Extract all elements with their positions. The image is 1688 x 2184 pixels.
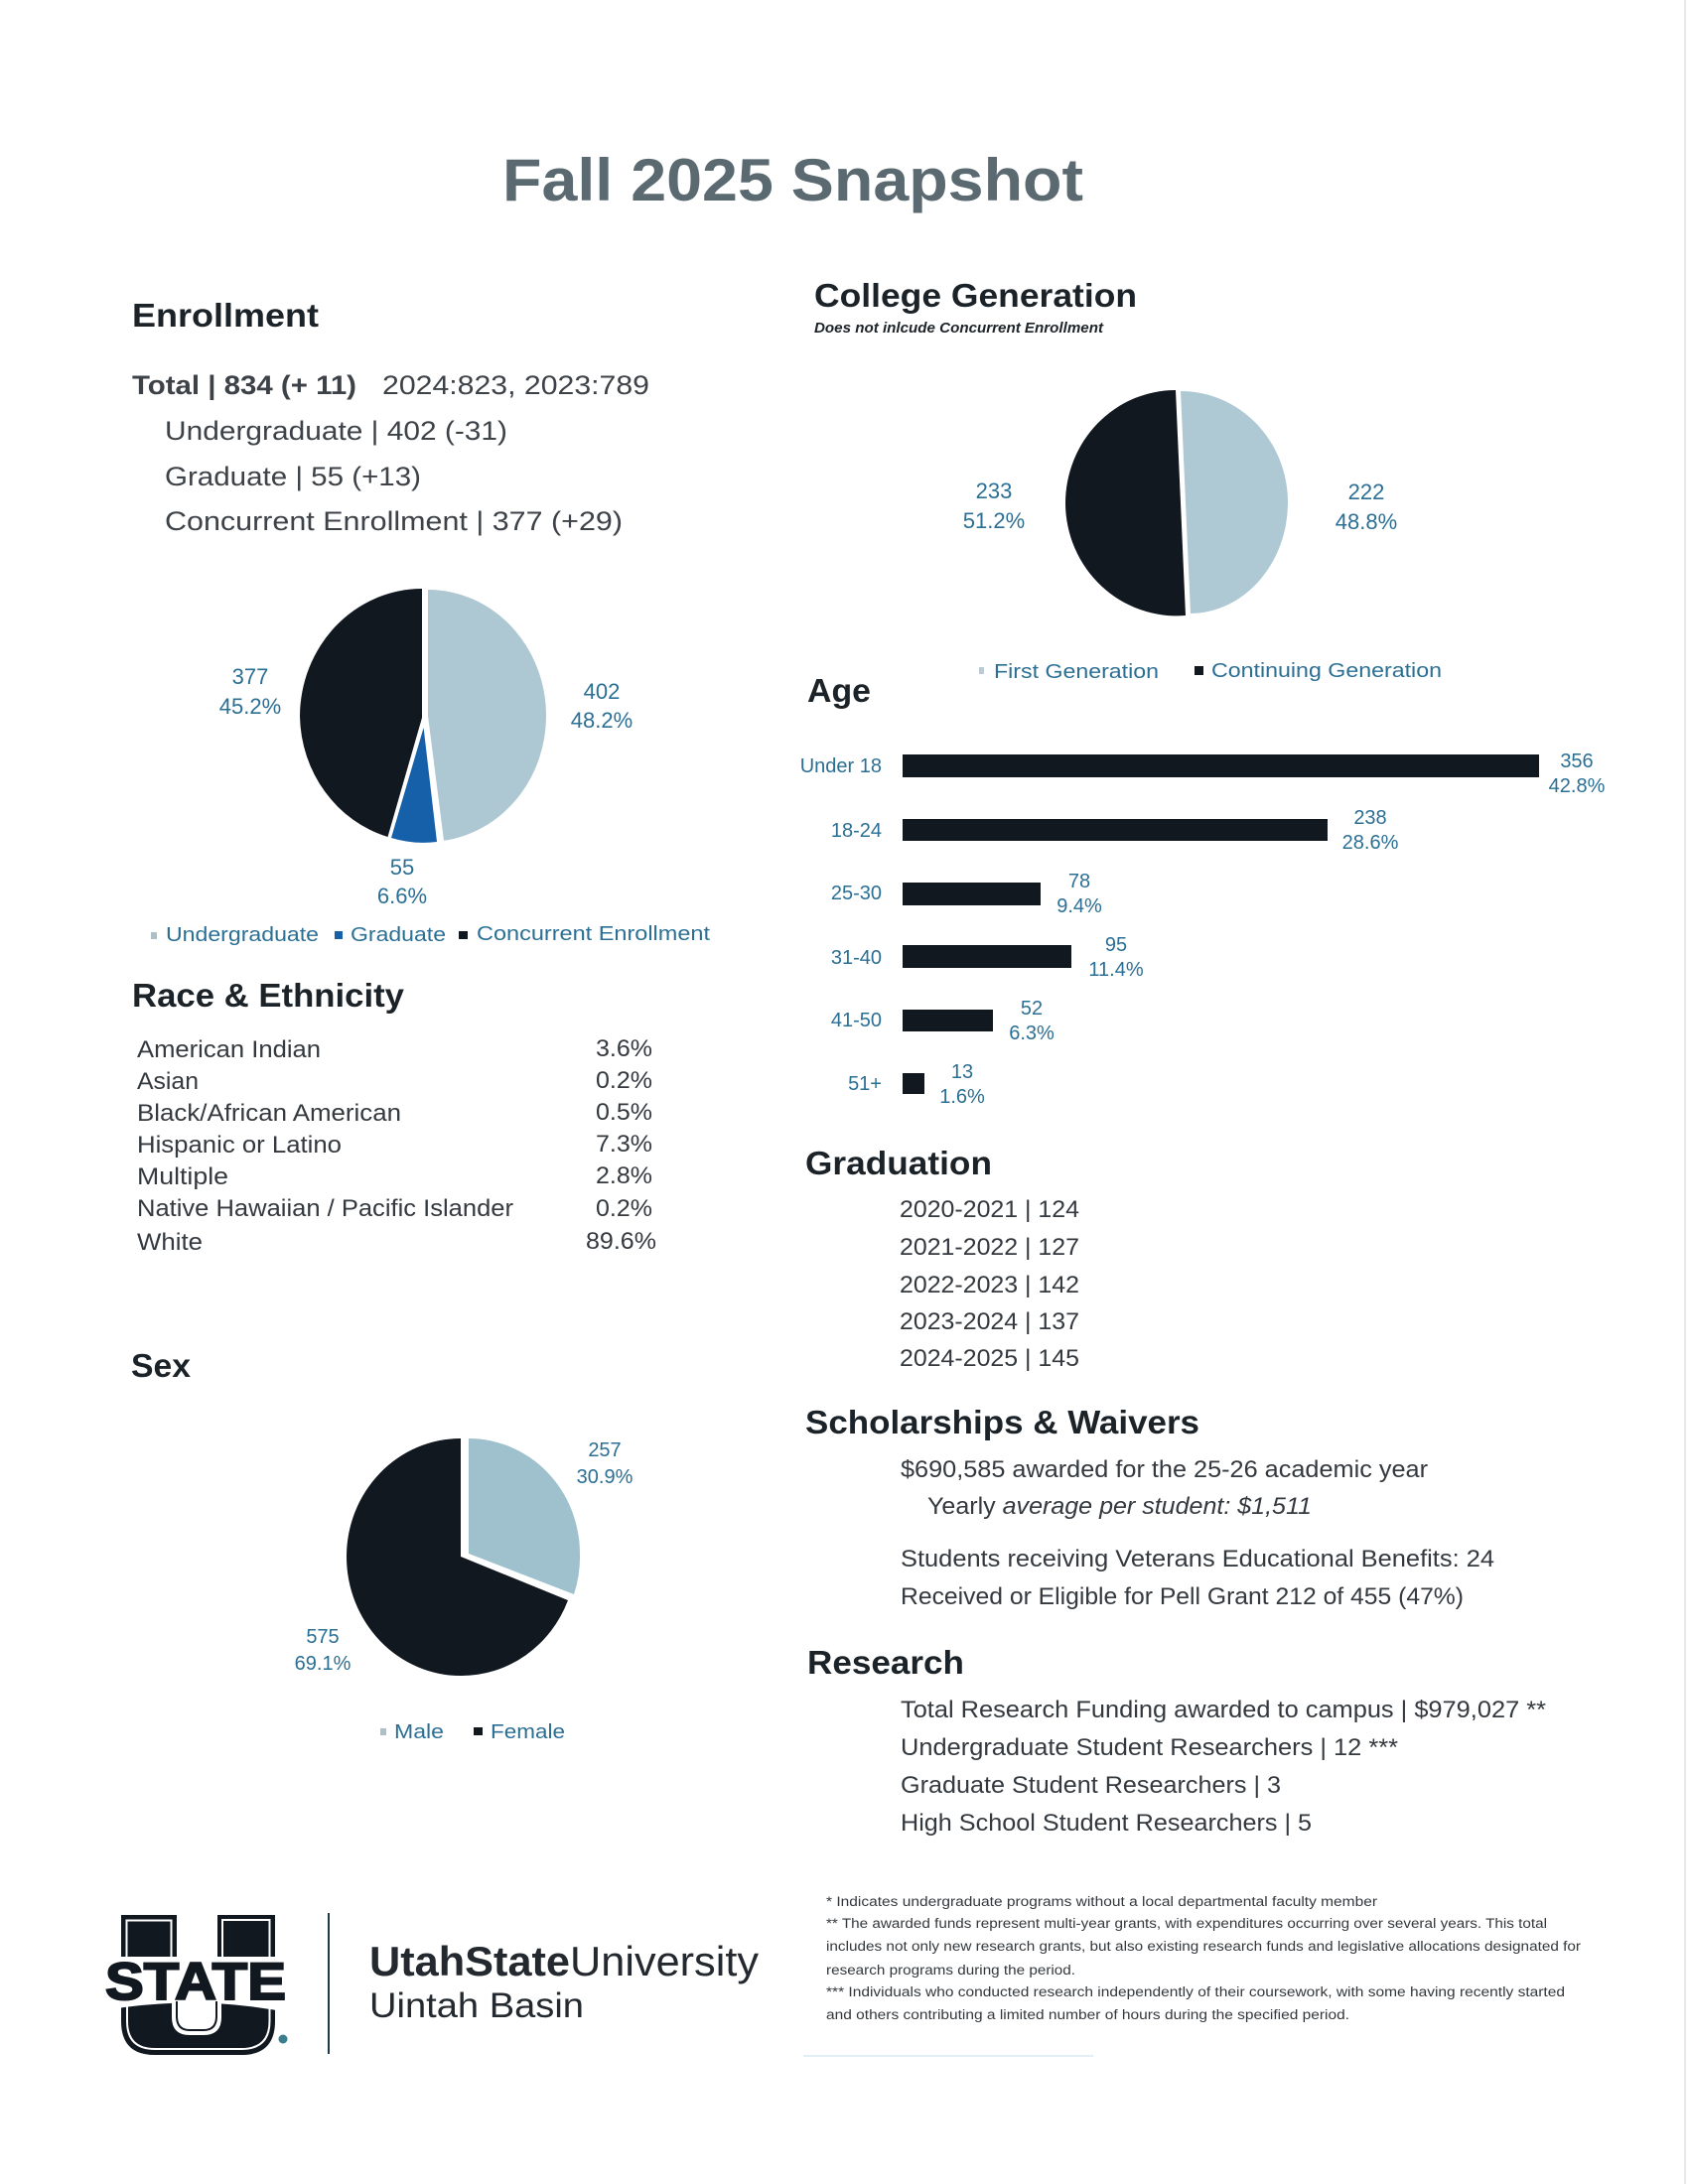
age category labels: 25-30 <box>831 883 882 904</box>
research text: Total Research Funding awarded to campus | $979,027 ** <box>901 1697 1546 1723</box>
wordmark: Utah State University Uintah Basin: UtahStateUniversity <box>369 1938 759 1984</box>
legend: enrollment <box>151 923 711 946</box>
pie chart: sex <box>347 1438 580 1676</box>
legend: college generation: Continuing Generation <box>1211 660 1442 682</box>
enrollment totals text: Total | 834 (+ 11) <box>132 370 356 400</box>
heading: race and ethnicity: Race & Ethnicity <box>132 977 405 1014</box>
research text: Graduate Student Researchers | 3 <box>901 1772 1281 1799</box>
footnotes: includes not only new research grants, but also existing research funds and legislative allocations designated for <box>826 1939 1582 1954</box>
wordmark: Utah State University Uintah Basin: Uintah Basin <box>369 1986 584 2025</box>
heading: scholarships and waivers: Scholarships & Waivers <box>805 1404 1199 1440</box>
age value labels: 52 <box>1021 998 1043 1020</box>
enrollment totals text <box>132 370 649 536</box>
panel: sex <box>131 1347 633 1743</box>
legend: college generation <box>979 660 1442 683</box>
logo: Utah State block U: STATE <box>105 1953 286 2011</box>
footnotes: ** The awarded funds represent multi-year grants, with expenditures occurring over several years. This total <box>826 1916 1547 1931</box>
legend: sex: Female <box>491 1721 565 1743</box>
research text: High School Student Researchers | 5 <box>901 1810 1312 1837</box>
panel: scholarships and waivers <box>805 1404 1494 1610</box>
note: excludes concurrent enrollment: Does not inlcude Concurrent Enrollment <box>814 321 1104 337</box>
race and ethnicity table: Multiple <box>137 1163 228 1190</box>
research text <box>901 1697 1546 1837</box>
age value labels: 11.4% <box>1088 959 1144 981</box>
pie labels: college generation <box>963 478 1397 534</box>
legend: sex: Male <box>394 1721 444 1743</box>
graduation counts: 2022-2023 | 142 <box>900 1272 1079 1298</box>
race and ethnicity table: 0.2% <box>596 1067 652 1094</box>
age value labels: 6.3% <box>1009 1023 1055 1044</box>
race and ethnicity table: White <box>137 1229 203 1256</box>
heading: sex: Sex <box>131 1347 192 1384</box>
footnotes: *** Individuals who conducted research independently of their coursework, with some having recently started <box>826 1984 1565 1999</box>
age category labels: 18-24 <box>831 820 882 842</box>
pie labels: enrollment: 6.6% <box>377 884 427 908</box>
age value labels: 13 <box>951 1061 973 1083</box>
divider <box>328 1913 330 2054</box>
title: Fall 2025 Snapshot <box>502 147 1083 213</box>
graduation counts: 2024-2025 | 145 <box>900 1345 1079 1372</box>
pie labels: college generation: 233 <box>976 478 1012 503</box>
age category labels: 51+ <box>848 1073 882 1095</box>
pie labels: sex: 30.9% <box>577 1466 633 1488</box>
scholarship text: Students receiving Veterans Educational Benefits: 24 <box>901 1546 1494 1572</box>
panel: enrollment <box>132 297 711 946</box>
research text: Undergraduate Student Researchers | 12 *** <box>901 1734 1398 1761</box>
age value labels: 42.8% <box>1549 775 1606 797</box>
footnotes: * Indicates undergraduate programs without a local departmental faculty member <box>826 1894 1378 1909</box>
pie labels: college generation: 48.8% <box>1336 509 1397 534</box>
race and ethnicity table: American Indian <box>137 1036 321 1063</box>
bars <box>903 754 1539 1094</box>
race and ethnicity table: 0.5% <box>596 1099 652 1126</box>
panel: research <box>807 1644 1546 1837</box>
footnotes <box>826 1894 1582 2022</box>
age value labels: 238 <box>1353 807 1387 829</box>
age category labels <box>800 755 882 1095</box>
enrollment totals text: Concurrent Enrollment | 377 (+29) <box>165 506 623 536</box>
legend: enrollment: Graduate <box>351 924 446 946</box>
pie labels: enrollment: 55 <box>390 855 414 880</box>
scholarship text: $690,585 awarded for the 25-26 academic year <box>901 1456 1428 1483</box>
race and ethnicity table: 89.6% <box>586 1228 656 1255</box>
pie labels: sex: 257 <box>588 1439 622 1461</box>
pie chart: enrollment <box>300 589 546 843</box>
age value labels: 78 <box>1068 871 1090 892</box>
heading: graduation: Graduation <box>805 1145 992 1181</box>
pie labels: sex: 69.1% <box>295 1653 352 1675</box>
logo: Utah State block U <box>99 1915 292 2055</box>
panel: graduation <box>805 1145 1079 1372</box>
race and ethnicity table: Black/African American <box>137 1100 401 1127</box>
panel: college generation <box>814 277 1442 683</box>
age category labels: 41-50 <box>831 1010 882 1031</box>
race and ethnicity table <box>137 1035 656 1256</box>
age value labels: 9.4% <box>1056 895 1102 917</box>
pie labels: enrollment: 45.2% <box>219 694 281 719</box>
race and ethnicity table: 2.8% <box>596 1162 652 1189</box>
pie labels: college generation: 222 <box>1348 479 1384 504</box>
wordmark: Utah State University Uintah Basin <box>369 1938 759 2025</box>
age value labels: 1.6% <box>939 1086 985 1108</box>
legend: college generation: First Generation <box>994 661 1159 683</box>
graduation counts <box>900 1196 1079 1372</box>
age value labels <box>939 751 1606 1108</box>
age category labels: 31-40 <box>831 947 882 969</box>
scholarship text: Received or Eligible for Pell Grant 212 of 455 (47%) <box>901 1583 1464 1610</box>
age value labels: 95 <box>1105 934 1127 956</box>
heading: age: Age <box>807 672 871 709</box>
panel: race and ethnicity <box>132 977 656 1256</box>
legend: enrollment: Concurrent Enrollment <box>477 923 711 945</box>
pie labels: enrollment: 377 <box>232 664 268 689</box>
age value labels: 356 <box>1560 751 1594 772</box>
race and ethnicity table: 3.6% <box>596 1035 652 1062</box>
heading: enrollment: Enrollment <box>132 297 319 334</box>
age value labels: 28.6% <box>1342 832 1399 854</box>
pie labels: enrollment <box>219 664 633 908</box>
enrollment totals text: Graduate | 55 (+13) <box>165 462 421 491</box>
footnotes: and others contributing a limited number of hours during the specified period. <box>826 2007 1349 2022</box>
bar chart: age <box>800 751 1606 1108</box>
age category labels: Under 18 <box>800 755 882 777</box>
scholarship text <box>901 1456 1494 1610</box>
panel: age <box>800 672 1606 1108</box>
graduation counts: 2020-2021 | 124 <box>900 1196 1079 1223</box>
race and ethnicity table: Native Hawaiian / Pacific Islander <box>137 1195 513 1222</box>
enrollment totals text: 2024:823, 2023:789 <box>382 370 649 400</box>
pie labels: enrollment: 48.2% <box>571 708 633 733</box>
scholarship text: Yearly average per student: $1,511 <box>927 1493 1312 1520</box>
graduation counts: 2023-2024 | 137 <box>900 1308 1079 1335</box>
pie labels: college generation: 51.2% <box>963 508 1025 533</box>
race and ethnicity table: 0.2% <box>596 1195 652 1222</box>
pie chart: college generation <box>1065 390 1288 615</box>
pie labels: sex <box>295 1439 633 1675</box>
race and ethnicity table: Hispanic or Latino <box>137 1132 342 1159</box>
race and ethnicity table: 7.3% <box>596 1131 652 1158</box>
heading: research: Research <box>807 1644 964 1681</box>
pie labels: enrollment: 402 <box>584 679 620 704</box>
pie labels: sex: 575 <box>306 1626 340 1648</box>
footnotes: research programs during the period. <box>826 1963 1075 1978</box>
enrollment totals text: Undergraduate | 402 (-31) <box>165 416 507 446</box>
race and ethnicity table: Asian <box>137 1068 199 1095</box>
heading: college generation: College Generation <box>814 277 1137 314</box>
graduation counts: 2021-2022 | 127 <box>900 1234 1079 1261</box>
legend: enrollment: Undergraduate <box>166 924 319 946</box>
legend: sex <box>380 1721 565 1743</box>
